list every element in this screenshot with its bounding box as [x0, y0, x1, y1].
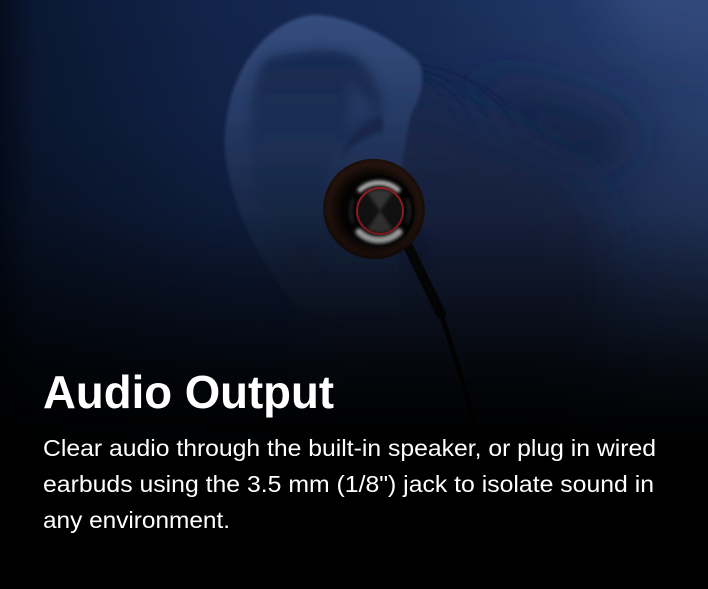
- ear antihelix highlight: [340, 82, 376, 134]
- description: any environment.: [43, 507, 230, 533]
- earbud housing: [343, 175, 415, 247]
- ear: [225, 15, 422, 340]
- hair: [408, 0, 708, 170]
- neck and face skin: [300, 90, 606, 460]
- title: Audio Output: [43, 366, 334, 418]
- earbud cable: [408, 246, 474, 424]
- description: [43, 435, 656, 533]
- metal disc: [357, 188, 403, 234]
- ear tip: [309, 145, 439, 273]
- shadow behind earbud: [405, 232, 431, 262]
- earbud: [309, 145, 439, 273]
- ear outer rim: [225, 15, 422, 340]
- ear inner bowl: [249, 50, 382, 273]
- red ring: [357, 188, 403, 234]
- metal ring highlights: [351, 183, 409, 240]
- ear antihelix shadow: [340, 116, 383, 158]
- description: Clear audio through the built-in speaker, or plug in wired: [43, 435, 656, 461]
- description: earbuds using the 3.5 mm (1/8") jack to isolate sound in: [43, 471, 654, 497]
